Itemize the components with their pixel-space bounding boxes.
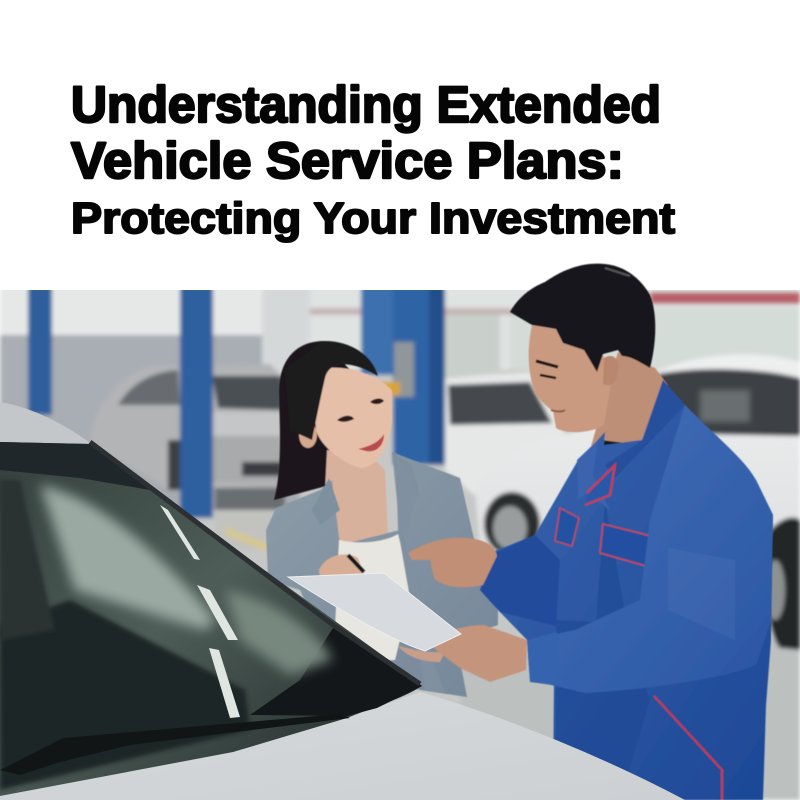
title line 2: Vehicle Service Plans: <box>71 132 624 189</box>
shirt <box>266 452 498 697</box>
face <box>312 368 392 468</box>
left interior pillar <box>0 480 55 640</box>
foreground car <box>0 402 685 800</box>
glass streaks <box>160 505 240 718</box>
eyes and mouth <box>337 398 384 451</box>
pointing hand <box>408 537 497 587</box>
cuff <box>527 632 560 686</box>
title background band above the photo <box>0 250 800 290</box>
windshield reflection <box>40 485 215 630</box>
shirt collar <box>312 452 420 525</box>
hair front <box>285 341 378 440</box>
ear <box>603 356 618 386</box>
photo: service bay scene <box>0 250 800 800</box>
lower hand under document <box>398 646 446 662</box>
man <box>408 264 773 800</box>
right sleeve <box>527 405 773 693</box>
windshield lower right reflection <box>225 590 332 675</box>
red zip trim <box>585 465 615 505</box>
car roof <box>0 402 92 444</box>
red lower seam <box>654 696 722 800</box>
jacket dark front placket <box>556 500 650 800</box>
document <box>288 573 461 651</box>
A-pillar <box>90 442 420 684</box>
collar <box>577 440 610 510</box>
windshield <box>0 442 422 796</box>
white cars behind <box>445 355 800 650</box>
title line 1: Understanding Extended <box>71 76 661 133</box>
hood <box>0 692 685 800</box>
white top <box>335 534 412 662</box>
neck <box>325 450 388 545</box>
holding hand <box>427 625 527 682</box>
workshop background <box>0 286 800 800</box>
eye and brow <box>536 361 565 412</box>
placket <box>396 455 445 692</box>
face <box>529 325 612 432</box>
jacket body <box>480 380 773 800</box>
blue lift pillars <box>28 286 445 518</box>
back hair <box>274 341 360 500</box>
dashboard <box>0 600 250 790</box>
chest pocket <box>600 524 659 568</box>
woman <box>266 341 498 697</box>
left sleeve <box>480 535 560 626</box>
wheels <box>484 492 800 650</box>
dark corner of windshield <box>250 628 422 716</box>
silver car behind <box>90 364 286 510</box>
title <box>71 76 675 243</box>
left pocket <box>555 508 579 546</box>
top tint band of windshield <box>0 442 150 490</box>
hair <box>510 264 655 372</box>
wiper <box>0 714 350 775</box>
neck and t-shirt <box>590 352 668 480</box>
writing hand and pen <box>319 554 364 578</box>
title line 3: Protecting Your Investment <box>71 194 675 243</box>
